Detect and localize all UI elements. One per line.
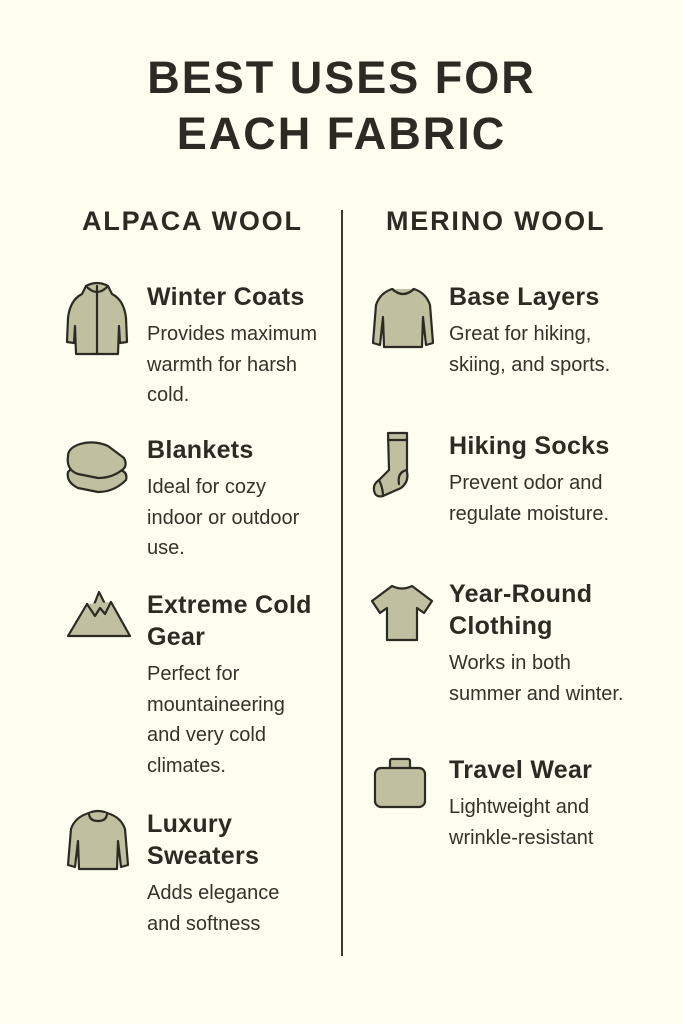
item: year-round clothing: summer and winter.	[449, 682, 624, 704]
heading: merino wool: MERINO WOOL	[386, 206, 605, 236]
item: base layers: Base Layers	[449, 283, 600, 311]
item: hiking socks	[449, 432, 610, 524]
item: year-round clothing: Year-Round	[449, 580, 592, 608]
item: hiking socks: regulate moisture.	[449, 502, 609, 524]
item: travel wear: wrinkle-resistant	[449, 826, 593, 848]
item: winter coats: Winter Coats	[147, 283, 305, 311]
icon: blanket	[66, 441, 128, 494]
item: extreme cold gear: Extreme Cold	[147, 591, 312, 619]
divider	[341, 210, 343, 956]
item: extreme cold gear: and very cold	[147, 724, 266, 746]
item: winter coats: Provides maximum	[147, 323, 317, 345]
item: luxury sweaters: and softness	[147, 912, 260, 934]
item: year-round clothing: Works in both	[449, 652, 571, 674]
item: blankets: indoor or outdoor	[147, 506, 299, 528]
item: winter coats: cold.	[147, 384, 189, 406]
icon: t-shirt	[370, 584, 434, 642]
item: winter coats: warmth for harsh	[147, 354, 297, 376]
item: luxury sweaters	[147, 810, 279, 934]
item: luxury sweaters: Sweaters	[147, 842, 259, 870]
item: base layers	[449, 283, 610, 376]
item: winter coats	[147, 283, 317, 406]
item: hiking socks: Prevent odor and	[449, 472, 602, 494]
icon: suitcase	[374, 758, 426, 808]
item: base layers: skiing, and sports.	[449, 354, 610, 376]
icon: sock	[372, 432, 408, 498]
item: blankets	[147, 436, 299, 559]
icon: coat	[66, 282, 128, 356]
item: extreme cold gear: Perfect for	[147, 663, 239, 685]
item: extreme cold gear: mountaineering	[147, 694, 285, 716]
icon: mountain	[66, 590, 132, 638]
item: blankets: use.	[147, 537, 185, 559]
item: base layers: Great for hiking,	[449, 323, 591, 345]
item: extreme cold gear: climates.	[147, 754, 226, 776]
icon: base layer	[372, 288, 434, 348]
title: EACH FABRIC	[177, 108, 506, 159]
item: extreme cold gear	[147, 591, 312, 776]
item: blankets: Blankets	[147, 436, 254, 464]
title: BEST USES FOR	[147, 52, 536, 103]
item: year-round clothing: Clothing	[449, 612, 553, 640]
item: travel wear: Lightweight and	[449, 796, 589, 818]
item: hiking socks: Hiking Socks	[449, 432, 610, 460]
item: luxury sweaters: Luxury	[147, 810, 232, 838]
item: travel wear: Travel Wear	[449, 756, 592, 784]
item: luxury sweaters: Adds elegance	[147, 882, 279, 904]
heading: alpaca wool: ALPACA WOOL	[82, 206, 303, 236]
item: extreme cold gear: Gear	[147, 623, 205, 651]
item: travel wear	[449, 756, 594, 848]
title	[147, 52, 536, 159]
item: year-round clothing	[449, 580, 624, 704]
icon: sweater	[66, 810, 130, 870]
item: blankets: Ideal for cozy	[147, 476, 266, 498]
